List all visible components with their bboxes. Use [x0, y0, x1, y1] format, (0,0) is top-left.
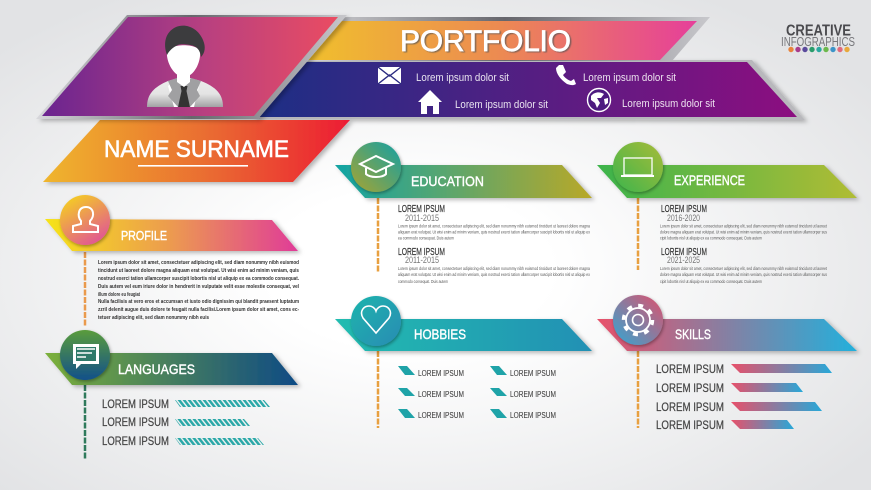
entries: experience: cipit lobortis nisl ut aliquip ex ea commodo consequat. Duis autem	[660, 279, 762, 284]
banner: name surname	[43, 120, 350, 182]
entries: education: LOREM IPSUM	[398, 204, 445, 215]
entries: education: aliquam erat volutpat. Ut wisi enim ad minim veniam, quis nostrud exerci tation ullamcorper suscipit lobortis nisl ut aliquip ex	[398, 272, 591, 277]
entries: education: commodo consequat. Duis autem	[398, 279, 448, 284]
entries: education: 2011-2015	[405, 213, 439, 223]
contact text: web: Lorem ipsum dolor sit	[622, 98, 715, 110]
panel: avatar	[36, 15, 347, 119]
entries: experience: LOREM IPSUM	[661, 247, 707, 258]
text block: profile: illum dolore eu feugiat	[98, 292, 140, 298]
banner: contact band	[252, 60, 805, 120]
logo: creative infographics: CREATIVE	[786, 22, 851, 40]
skill rows: languages: LOREM IPSUM	[102, 436, 169, 448]
skill rows: skills: LOREM IPSUM	[656, 420, 724, 432]
logo: creative infographics	[781, 22, 855, 52]
text block: profile: zzril delenit augue duis dolore te feugait nulla facilisi.Lorem ipsum dolor sit amet, cons ec-	[98, 307, 299, 313]
skill rows: skills	[656, 364, 832, 432]
entries: experience: cipit lobortis nisl ut aliquip ex ea commodo consequat. Duis autem	[660, 236, 762, 240]
header: hobbies	[335, 296, 592, 351]
header: languages: LANGUAGES	[118, 362, 195, 377]
entries: experience: Lorem ipsum dolor sit amet, consectetuer adipiscing elit, sed diam nonummy nibh euismod tincidunt ut laoreet	[660, 266, 828, 271]
list: hobbies	[398, 366, 556, 420]
list: hobbies: LOREM IPSUM	[510, 411, 556, 420]
entries: experience: dolore magna aliquam erat volutpat. Ut wisi enim ad minim veniam, quis nostrud exerci tation ullamcorper sus	[660, 230, 828, 234]
header: languages	[45, 330, 298, 385]
entries: education: aliquam erat volutpat. Ut wisi enim ad minim veniam, quis nostrud exerci tation ullamcorper suscipit lobortis nisl ut aliquip ex	[398, 230, 591, 234]
timeline: languages	[84, 385, 86, 459]
icon: phone	[556, 65, 576, 85]
entries: experience: dolore magna aliquam erat volutpat. Ut wisi enim ad minim veniam, quis nostrud exerci tation ullamcorper sus	[660, 272, 828, 277]
skill rows: skills: LOREM IPSUM	[656, 402, 724, 414]
list: hobbies: LOREM IPSUM	[418, 369, 464, 378]
contact text: address: Lorem ipsum dolor sit	[455, 99, 548, 111]
text block: profile: tetuer adipiscing elit, sed diam nonummy nibh euis	[98, 315, 209, 321]
icon: person	[147, 26, 223, 107]
header: skills	[597, 295, 857, 351]
header: profile	[45, 195, 298, 251]
banner: portfolio title	[300, 17, 710, 61]
panel: hobbies	[335, 296, 592, 428]
contact text: mail: Lorem ipsum dolor sit	[416, 72, 509, 84]
contact text: phone: Lorem ipsum dolor sit	[583, 72, 676, 84]
entries: education: 2011-2015	[405, 255, 439, 265]
header: hobbies: HOBBIES	[414, 326, 466, 342]
skill rows: languages: LOREM IPSUM	[102, 399, 169, 411]
icon: envelope	[378, 67, 401, 84]
entries: experience: 2016-2020	[667, 213, 700, 223]
text block: profile: Duis autem vel eum iriure dolor in hendrerit in vulputate velit esse molestie consequat, vel	[98, 284, 299, 290]
text block: profile: Lorem ipsum dolor sit amet, consectetuer adipiscing elit, sed diam nonummy nibh euismod	[98, 260, 299, 266]
header: education	[335, 142, 592, 198]
entries: experience: Lorem ipsum dolor sit amet, consectetuer adipiscing elit, sed diam nonummy nibh euismod tincidunt ut laoreet	[660, 224, 828, 228]
entries: education: LOREM IPSUM	[398, 247, 445, 258]
panel: profile	[45, 195, 299, 327]
text block: profile: Nulla facilisis at vero eros et accumsan et iusto odio dignissim qui blandit praesent luptatum	[98, 299, 299, 305]
entries: education: ea commodo consequat. Duis autem	[398, 236, 454, 240]
text block: profile: tincidunt ut laoreet dolore magna aliquam erat volutpat. Ut wisi enim ad minim veniam, quis	[98, 268, 299, 274]
panel: experience	[597, 142, 857, 284]
timeline: profile	[84, 252, 86, 327]
skill rows: languages: LOREM IPSUM	[102, 417, 169, 429]
icon: globe	[588, 88, 610, 112]
skill rows: skills: LOREM IPSUM	[656, 364, 724, 376]
skill rows: languages	[102, 399, 270, 448]
icon: house	[418, 90, 442, 114]
list: hobbies: LOREM IPSUM	[418, 390, 464, 399]
entries: education: Lorem ipsum dolor sit amet, consectetuer adipiscing elit, sed diam nonummy nibh euismod tincidunt ut laoreet dolore magna	[398, 224, 590, 228]
text block: profile: nostrud exerci tation ullamcorper suscipit lobortis nisl ut aliquip ex ea commodo consequat.	[98, 276, 299, 282]
text block: profile	[98, 260, 299, 321]
panel: education	[335, 142, 592, 284]
header: profile: PROFILE	[121, 228, 167, 243]
entries: education	[398, 204, 591, 284]
panel: skills	[597, 295, 857, 432]
list: hobbies: LOREM IPSUM	[510, 369, 556, 378]
entries: experience: 2021-2025	[667, 255, 700, 265]
skill rows: skills: LOREM IPSUM	[656, 383, 724, 395]
header: skills: SKILLS	[675, 326, 711, 342]
timeline: hobbies	[377, 351, 379, 428]
list: hobbies: LOREM IPSUM	[510, 390, 556, 399]
entries: education: Lorem ipsum dolor sit amet, consectetuer adipiscing elit, sed diam nonummy nibh euismod tincidunt ut laoreet dolore magna	[398, 266, 590, 271]
timeline: skills	[637, 351, 639, 428]
banner: name surname: NAME SURNAME	[104, 136, 289, 163]
banner: portfolio title: PORTFOLIO	[400, 25, 571, 58]
timeline: experience	[637, 198, 639, 270]
header: experience	[597, 142, 857, 198]
header: education: EDUCATION	[411, 173, 484, 189]
entries: experience: LOREM IPSUM	[661, 204, 707, 215]
entries: experience	[660, 204, 828, 284]
list: hobbies: LOREM IPSUM	[418, 411, 464, 420]
header: experience: EXPERIENCE	[674, 172, 745, 188]
timeline: education	[377, 198, 379, 273]
panel: languages	[45, 330, 298, 459]
